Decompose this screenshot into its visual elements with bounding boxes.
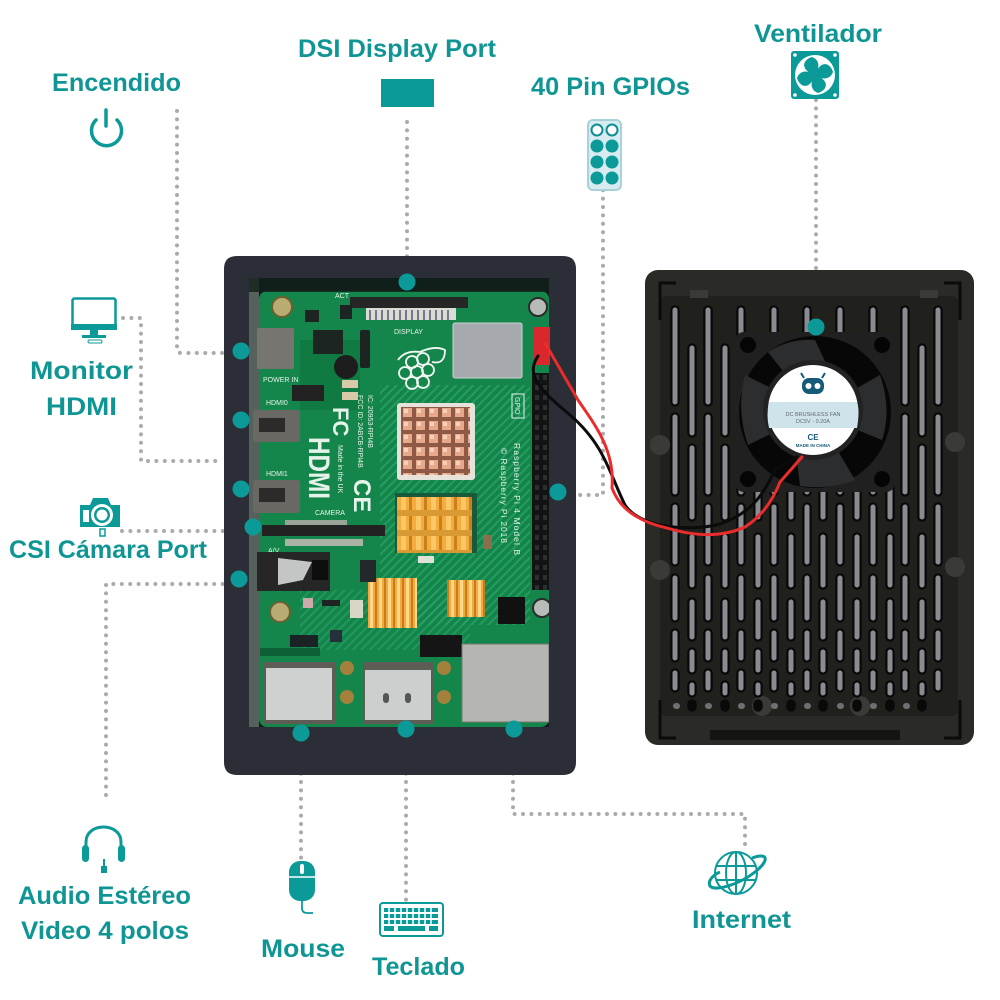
USB-C port: [257, 328, 294, 369]
fan: [735, 332, 895, 492]
board markings: CE: [348, 479, 375, 512]
heading: Teclado: Teclado: [372, 953, 465, 981]
fan label: DC5V - 0.20A: [796, 419, 830, 425]
board markings: CAMERA: [315, 510, 345, 517]
board markings: IC: 20953-RPI4B: [366, 395, 373, 448]
icon: globe: [709, 852, 765, 894]
HDMI ports: [253, 410, 300, 513]
heading: Audio Estereo Video 4 polos: [18, 882, 191, 945]
silver chip: [453, 323, 522, 378]
camera connector: [262, 520, 385, 546]
icon: headphones with jack: [82, 827, 125, 873]
icon: GPIO header: [588, 120, 621, 190]
heading: Mouse: Mouse: [261, 935, 345, 963]
fan label: CE: [807, 433, 819, 442]
rear case with fan: [645, 270, 974, 745]
board markings: HDMI0: [266, 400, 288, 407]
heading: Audio Estereo Video 4 polos: Audio Estéreo: [18, 882, 191, 910]
display connector: [350, 297, 468, 320]
vent slots: [675, 310, 938, 707]
gold heatsink right: [447, 580, 485, 617]
small components: [260, 535, 492, 657]
GPIO header: [532, 373, 550, 590]
heading: Encendido: Encendido: [52, 69, 181, 97]
ethernet port: [462, 644, 549, 722]
board markings: HDMI: [302, 437, 335, 499]
USB port left: [263, 661, 354, 724]
board markings: Raspberry Pi 4 Model B: [512, 443, 522, 555]
case bumps: [650, 290, 965, 716]
label robot logo: [801, 373, 825, 394]
board markings: FC: [328, 407, 353, 436]
board markings: POWER IN: [263, 377, 298, 384]
AV jack: [257, 552, 330, 591]
top shadow: [249, 278, 549, 292]
case opening: [240, 270, 560, 740]
board markings: © Raspberry Pi 2018: [499, 448, 509, 543]
case frame: [224, 256, 576, 775]
screws: [270, 297, 551, 622]
fan label: [763, 360, 863, 460]
heading: Audio Estereo Video 4 polos: Video 4 polos: [21, 917, 189, 945]
copper heatsink: [397, 403, 475, 480]
board markings: Made in the UK: [336, 445, 343, 494]
board markings: HDMI1: [266, 471, 288, 478]
board markings: FCC ID: 2ABCB-RPI4B: [356, 395, 363, 468]
case shell: [645, 270, 974, 745]
Raspberry Pi in case: [224, 256, 576, 775]
board markings: A/V: [268, 548, 280, 555]
icon: keyboard: [380, 903, 443, 936]
board markings: ACT: [335, 293, 350, 300]
heading: CSI Camara Port: CSI Cámara Port: [9, 536, 208, 564]
icon: DSI port: [381, 79, 434, 107]
PCB: [259, 291, 549, 727]
power chips: [292, 305, 370, 401]
USB port right: [363, 661, 451, 724]
connection markers: [230, 274, 824, 742]
gold heatsink left: [368, 578, 417, 628]
heading: Monitor HDMI: [30, 357, 133, 421]
gold heatsink large: [395, 493, 477, 553]
fan label: DC BRUSHLESS FAN: [785, 412, 841, 418]
heading: Internet: Internet: [692, 906, 792, 934]
PoE header: [498, 597, 525, 624]
board markings: GPIO: [513, 397, 520, 415]
raspberry logo: [398, 348, 445, 389]
icon: camera: [80, 498, 120, 536]
board markings: DISPLAY: [394, 329, 423, 336]
icon: monitor: [71, 298, 117, 343]
fan label: MADE IN CHINA: [796, 443, 831, 448]
heading: 40 Pin GPIOs: 40 Pin GPIOs: [531, 73, 690, 101]
heading: Monitor HDMI: Monitor: [30, 357, 133, 385]
icon: fan: [791, 51, 839, 99]
board markings: [263, 293, 524, 555]
icon: mouse: [289, 861, 315, 913]
connector lines: [106, 100, 816, 900]
fan wires: [533, 327, 802, 535]
heading: Monitor HDMI: HDMI: [46, 393, 117, 421]
heading: Ventilador: Ventilador: [754, 20, 882, 48]
icon: power: [92, 110, 122, 146]
heading: DSI Display Port: DSI Display Port: [298, 35, 497, 63]
